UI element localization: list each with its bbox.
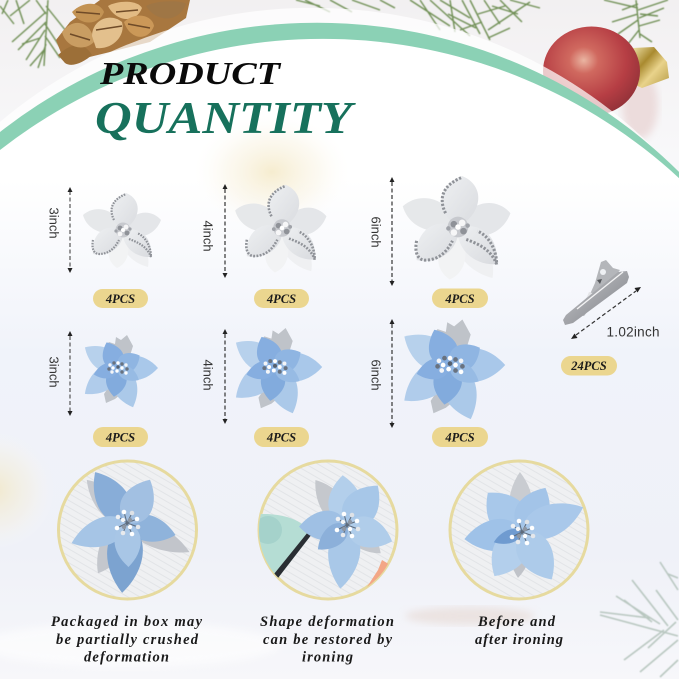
dimension: white 4 inch: 4inch xyxy=(200,220,216,252)
quantity badge blue 6 inch xyxy=(432,427,488,447)
dimension: white 3 inch: 3inch xyxy=(46,207,62,239)
clip length label: 1.02inch xyxy=(606,324,660,340)
quantity badge blue 3 inch: 4PCS xyxy=(105,430,135,444)
blue poinsettia 6 inch xyxy=(395,319,505,425)
dimension: white 4 inch xyxy=(200,184,228,278)
quantity badge blue 3 inch xyxy=(93,427,148,447)
white poinsettia 4 inch xyxy=(235,185,326,272)
white poinsettia 3 inch xyxy=(83,193,161,268)
caption: before and after: after ironing xyxy=(475,632,563,648)
caption: shape deformation: Shape deformation xyxy=(260,614,394,630)
title line: PRODUCT: PRODUCT xyxy=(99,55,282,91)
background xyxy=(0,0,679,180)
photo: ironing flower xyxy=(250,461,397,599)
dimension: blue 6 inch: 6inch xyxy=(368,359,384,391)
quantity badge white 6 inch: 4PCS xyxy=(444,292,475,306)
dimension: blue 6 inch xyxy=(368,319,394,428)
title line: QUANTITY: QUANTITY xyxy=(95,92,356,143)
dimension: white 3 inch xyxy=(46,187,72,273)
quantity badge clips xyxy=(561,356,617,376)
pine needles left xyxy=(0,0,70,68)
quantity badge blue 6 inch: 4PCS xyxy=(444,430,475,444)
photo: crushed flower xyxy=(58,461,196,599)
caption: before and after: Before and xyxy=(477,614,556,630)
top decoration: pine branches, cone and ornament xyxy=(0,0,669,139)
title xyxy=(95,55,356,143)
caption: packaged in box: deformation xyxy=(84,650,169,666)
ornament cap xyxy=(632,47,669,88)
dimension: blue 4 inch: 4inch xyxy=(200,359,216,391)
quantity badge blue 4 inch xyxy=(254,427,309,447)
caption: packaged in box xyxy=(51,614,203,666)
white poinsettia 6 inch xyxy=(403,176,510,279)
pine branch bottom right xyxy=(600,562,678,677)
caption: before and after xyxy=(475,614,563,648)
caption: packaged in box: be partially crushed xyxy=(56,632,199,648)
ornament shadow xyxy=(622,71,658,139)
dimension: blue 3 inch: 3inch xyxy=(46,356,62,388)
dimension: white 6 inch: 6inch xyxy=(368,216,384,248)
dimension: blue 3 inch xyxy=(46,331,72,416)
pine cone xyxy=(56,0,190,65)
dimension: white 6 inch xyxy=(368,177,394,286)
quantity badge white 3 inch xyxy=(93,289,148,308)
pine needles right xyxy=(604,0,668,44)
photo: restored flower xyxy=(450,461,589,599)
icon: metal clip xyxy=(563,260,629,325)
caption: packaged in box: Packaged in box may xyxy=(51,614,203,630)
blue poinsettia 3 inch xyxy=(78,335,158,412)
quantity badge white 4 inch: 4PCS xyxy=(266,292,296,306)
dimension arrow: clip length xyxy=(571,287,641,339)
caption: shape deformation xyxy=(260,614,394,666)
quantity badge white 6 inch xyxy=(432,288,488,308)
pine needles centre xyxy=(296,0,540,40)
quantity badge clips: 24PCS xyxy=(570,359,607,373)
red ornament xyxy=(543,26,640,116)
blue poinsettia 4 inch xyxy=(228,328,322,418)
quantity badge white 4 inch xyxy=(254,289,309,308)
caption: shape deformation: ironing xyxy=(302,650,353,666)
quantity badge blue 4 inch: 4PCS xyxy=(266,430,296,444)
quantity badge white 3 inch: 4PCS xyxy=(105,292,135,306)
caption: shape deformation: can be restored by xyxy=(263,632,393,648)
dimension: blue 4 inch xyxy=(200,329,228,424)
